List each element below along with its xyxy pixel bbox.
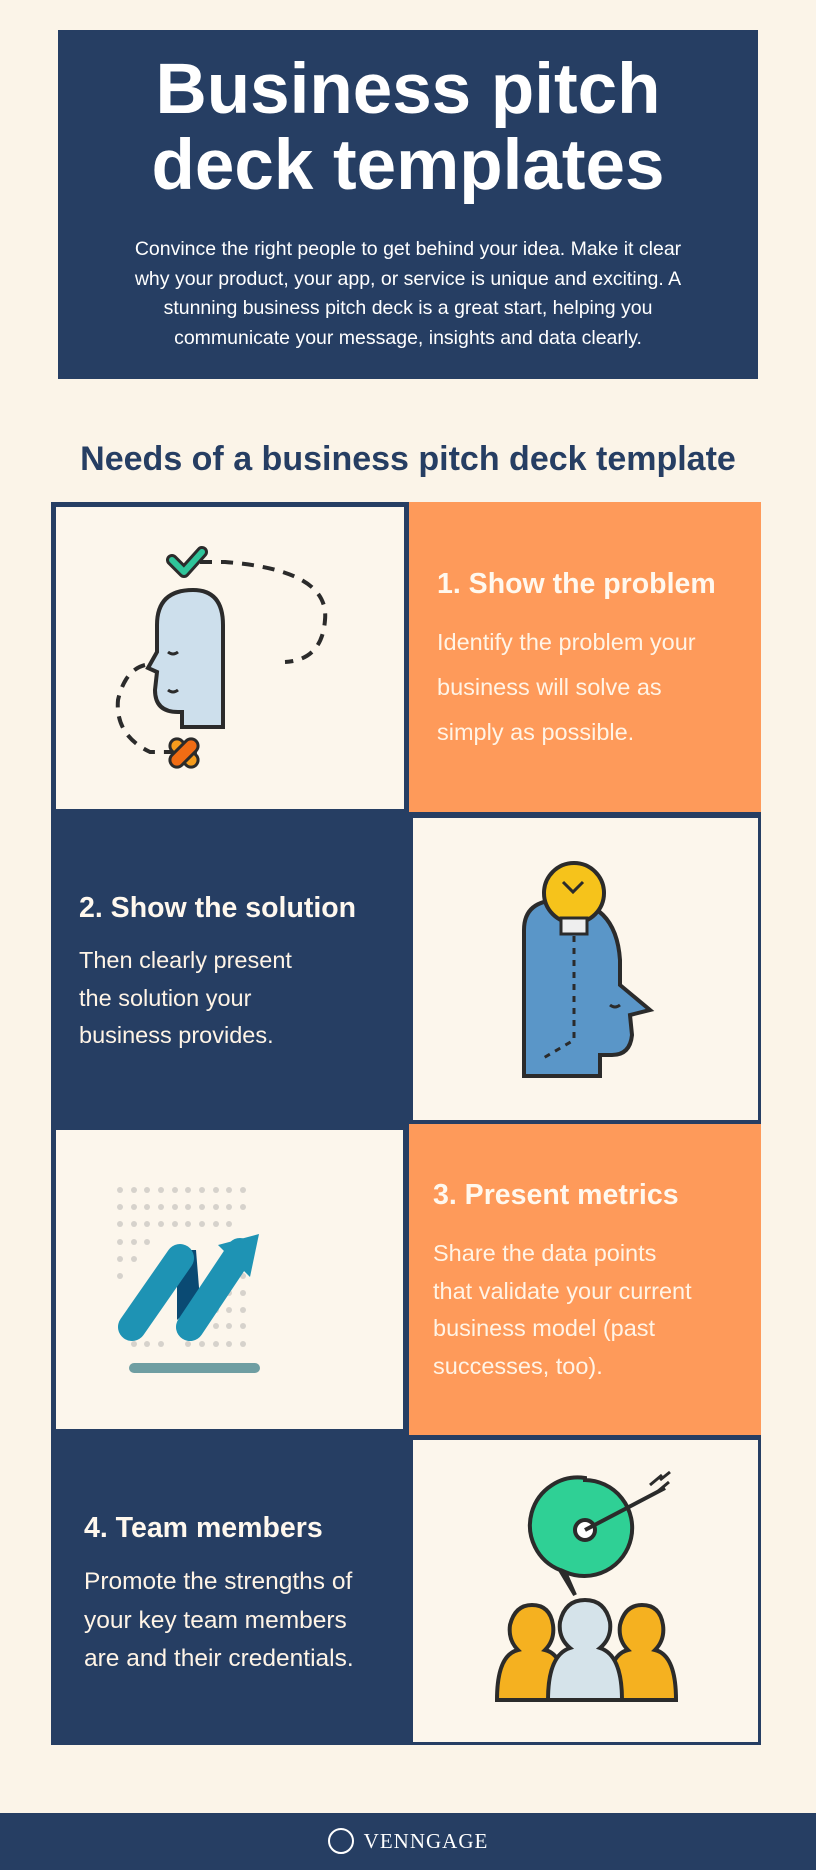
row 2 text panel: Then clearly present xyxy=(79,947,292,973)
row 1 text panel: Identify the problem your xyxy=(437,629,696,655)
title: deck templates xyxy=(151,126,665,205)
section heading: Needs of a business pitch deck template xyxy=(80,440,736,478)
row 1 text panel xyxy=(409,502,761,812)
row 4 text panel: Promote the strengths of xyxy=(84,1568,352,1595)
icon: growth arrow chart xyxy=(117,1187,260,1373)
intro paragraph: why your product, your app, or service is unique and exciting. A xyxy=(135,268,681,290)
row 3 text panel xyxy=(409,1124,761,1435)
row 4 text panel: are and their credentials. xyxy=(84,1645,354,1672)
row 3 text panel: business model (past xyxy=(433,1315,655,1341)
intro paragraph xyxy=(134,238,682,348)
intro paragraph: stunning business pitch deck is a great start, helping you xyxy=(164,297,652,319)
row 2 image panel xyxy=(413,818,758,1120)
row 2 text panel xyxy=(79,892,356,1048)
grid frame xyxy=(51,502,761,1745)
row 3 text panel: successes, too). xyxy=(433,1352,603,1378)
footer xyxy=(0,1813,816,1870)
row 3 text panel: that validate your current xyxy=(433,1278,692,1304)
row 1 image panel xyxy=(56,507,404,809)
icon: head with lightbulb xyxy=(522,861,654,1078)
row 3 text panel: Share the data points xyxy=(433,1240,656,1266)
row 3 image panel xyxy=(56,1130,403,1429)
row 4 text panel xyxy=(84,1512,354,1672)
intro paragraph: communicate your message, insights and data clearly. xyxy=(174,326,642,348)
row 4 image panel xyxy=(413,1440,758,1742)
row 4 text panel: 4. Team members xyxy=(84,1512,323,1544)
icon: head with check and bandage xyxy=(116,546,328,769)
row 2 text panel: business provides. xyxy=(79,1022,274,1048)
footer logo: VENNGAGE xyxy=(364,1829,488,1853)
icon: team with target xyxy=(495,1470,678,1702)
header panel xyxy=(58,30,758,379)
row 1 text panel: simply as possible. xyxy=(437,719,634,745)
title xyxy=(151,50,665,205)
row 1 text panel: 1. Show the problem xyxy=(437,568,716,600)
title: Business pitch xyxy=(155,50,660,129)
row 1 text panel: business will solve as xyxy=(437,674,662,700)
row 3 text panel: 3. Present metrics xyxy=(433,1179,679,1211)
row 2 text panel: the solution your xyxy=(79,984,251,1010)
row 2 text panel: 2. Show the solution xyxy=(79,892,356,924)
intro paragraph: Convince the right people to get behind your idea. Make it clear xyxy=(135,238,681,260)
row 4 text panel: your key team members xyxy=(84,1606,347,1634)
